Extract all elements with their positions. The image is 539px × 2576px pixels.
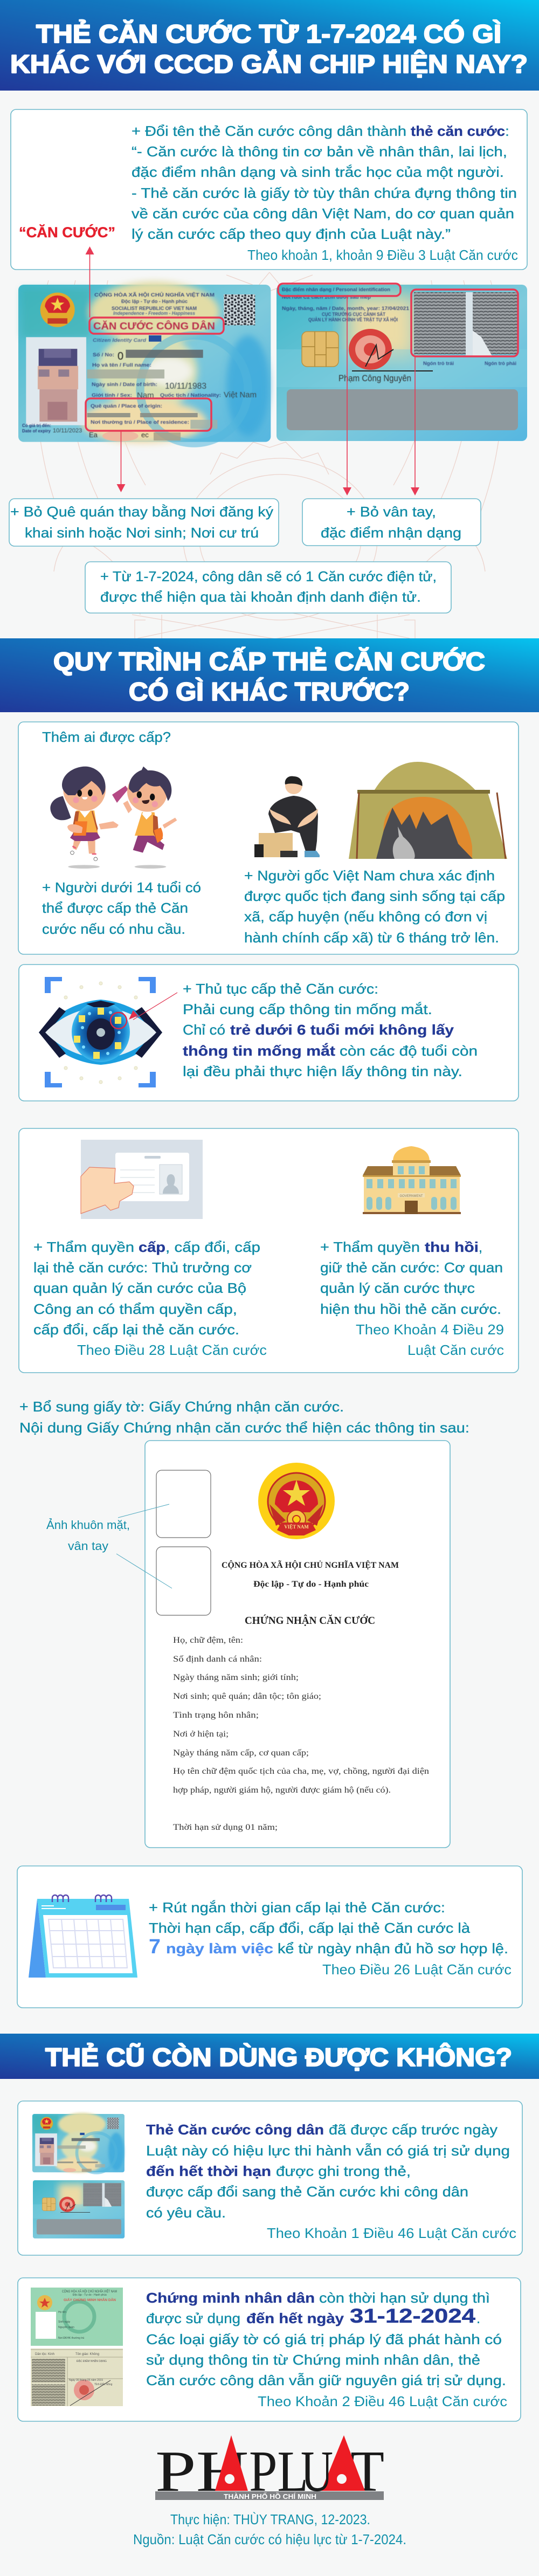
credits: Thực hiện: THÙY TRANG, 12-2023. xyxy=(170,2511,370,2527)
header: process section: QUY TRÌNH CẤP THẺ CĂN CƯỚC xyxy=(53,647,485,676)
document fields: Tình trạng hôn nhân; xyxy=(173,1711,259,1720)
text block: definition xyxy=(132,123,518,263)
text block: old ID rule: Luật này có hiệu lực thi hành vẫn có giá trị sử dụng xyxy=(146,2143,510,2159)
text block: seven working days: kể từ ngày nhận đủ hồ sơ hợp lệ. xyxy=(278,1940,508,1957)
image: front of citizen ID card: Có giá trị đến: xyxy=(22,423,51,428)
credits xyxy=(133,2511,406,2547)
text block: seven working days: + Rút ngắn thời gian cấp lại thẻ Căn cước: xyxy=(149,1899,445,1916)
text block: definition: “- Căn cước là thông tin cơ bản về nhân thân, lai lịch, xyxy=(132,143,507,160)
text block: old ID rule: đã được cấp trước ngày xyxy=(329,2122,497,2138)
text block: old ID rule: có yêu cầu. xyxy=(146,2205,226,2221)
text block: issuing authority xyxy=(33,1239,267,1358)
text block: children under 14: cước nếu có nhu cầu. xyxy=(42,921,185,937)
image: front of citizen ID card: Số / No: xyxy=(93,352,114,357)
panel: shorter issuing time xyxy=(17,1866,522,2008)
text block: people's ID rule: Căn cước công dân vẫn giữ nguyên giá trị sử dụng. xyxy=(146,2372,506,2388)
image: front of people's ID card: CỘNG HÒA XÃ HỘI CHỦ NGHĨA VIỆT NAM xyxy=(62,2289,117,2293)
header: process section xyxy=(0,638,539,712)
image: back of citizen ID card: QUẢN LÝ HÀNH CHÍNH VỀ TRẬT TỰ XÃ HỘI xyxy=(308,316,398,322)
text block: iris procedure: + Thủ tục cấp thẻ Căn cước: xyxy=(183,981,378,997)
callout: remove fingerprints xyxy=(302,499,481,546)
arrow: to iris xyxy=(129,993,179,1020)
text block: people's ID rule: Chứng minh nhân dân xyxy=(146,2290,315,2306)
text block: issuing authority: cấp xyxy=(139,1239,165,1255)
text block: issuing authority: , cấp đổi, cấp xyxy=(165,1239,260,1255)
text block: seven working days xyxy=(149,1899,512,1978)
text block: old ID rule: được ghi trong thẻ, xyxy=(276,2163,411,2179)
text block: revoking authority: , xyxy=(479,1239,482,1255)
document fields xyxy=(173,1636,429,1832)
callout: remove fingerprints: đặc điểm nhận dạng xyxy=(321,525,461,541)
image: front of people's ID card: GIẤY CHỨNG MINH NHÂN DÂN xyxy=(64,2298,116,2302)
text block: people's ID rule: Theo Khoản 2 Điều 46 Luật Căn cước xyxy=(258,2393,507,2409)
callout: remove fingerprints: + Bỏ vân tay, xyxy=(347,504,436,520)
text block: certificate intro: + Bổ sung giấy tờ: Giấy Chứng nhận căn cước. xyxy=(19,1399,344,1415)
text block: Vietnamese origin people: xã, cấp huyện (nếu không có đơn vị xyxy=(244,908,487,925)
logo: Pháp Luật xyxy=(155,2435,384,2504)
image: back of people's ID card: Dân tộc: Kinh xyxy=(35,2353,54,2356)
panel: old citizen ID card validity xyxy=(18,2101,522,2255)
text block: revoking authority: quản lý căn cước thực xyxy=(320,1280,475,1296)
image: front of citizen ID card: Citizen Identity Card xyxy=(93,338,147,343)
document fields: Ngày tháng năm sinh; giới tính; xyxy=(173,1673,299,1682)
header: main title: KHÁC VỚI CCCD GẮN CHIP HIỆN NAY? xyxy=(10,50,528,78)
image: front of people's ID card: Sinh ngày xyxy=(58,2320,71,2324)
logo: Pháp Luật: U xyxy=(301,2440,333,2504)
image: front of citizen ID card: Nam xyxy=(137,391,154,400)
text block: children under 14: + Người dưới 14 tuổi có xyxy=(42,879,201,896)
image: front of citizen ID card: Date of expiry xyxy=(22,429,51,433)
text block: Vietnamese origin people: + Người gốc Việt Nam chưa xác định xyxy=(244,867,495,884)
image: back of citizen ID card: Ngón trỏ trái xyxy=(423,361,454,366)
image: citizen ID thumbnails xyxy=(32,2113,125,2238)
document fields: Họ tên chữ đệm quốc tịch của cha, mẹ, vợ, chồng, người đại diện xyxy=(173,1767,429,1776)
document heading: CỘNG HÒA XÃ HỘI CHỦ NGHĨA VIỆT NAM xyxy=(222,1560,399,1570)
header: process section: CÓ GÌ KHÁC TRƯỚC? xyxy=(129,677,410,706)
image: front of citizen ID card: Độc lập - Tự do - Hạnh phúc xyxy=(121,299,188,304)
image: back of people's ID card: Ngày 06 tháng 05 năm 2015 xyxy=(69,2379,103,2382)
panel: renaming to căn cước xyxy=(11,109,527,270)
image: front of citizen ID card: 0 xyxy=(118,350,123,362)
label: face photo and fingerprint xyxy=(46,1504,172,1588)
logo: Pháp Luật: T xyxy=(350,2440,384,2504)
text block: Vietnamese origin people: hành chính cấp xã) từ 6 tháng trở lên. xyxy=(244,929,499,946)
text block: definition: lý căn cước cấp theo quy định của Luật này.” xyxy=(132,226,451,242)
text block: revoking authority: Theo Khoản 4 Điều 29 xyxy=(356,1321,504,1338)
icon: hand holding ID card xyxy=(81,1140,203,1219)
text block: old ID rule xyxy=(146,2122,516,2241)
image: front of people's ID card xyxy=(31,2288,123,2346)
icon: calendar xyxy=(29,1895,137,1978)
text block: seven working days: Thời hạn cấp, cấp đổi, cấp lại thẻ Căn cước là xyxy=(149,1920,471,1936)
image: front of citizen ID card: Ea xyxy=(89,431,98,439)
text block: seven working days: ngày làm việc xyxy=(166,1940,273,1957)
text block: issuing authority: cấp đổi, cấp lại thẻ căn cước. xyxy=(33,1321,239,1338)
image: front of people's ID card: Nơi ĐKHK thường trú xyxy=(58,2337,84,2340)
icon: government building xyxy=(363,1146,461,1214)
header: main title: THẺ CĂN CƯỚC TỪ 1-7-2024 CÓ GÌ xyxy=(36,19,501,48)
panel: people's ID card validity xyxy=(18,2278,521,2421)
text block: iris procedure: thông tin mống mắt xyxy=(183,1043,335,1059)
text block: old ID rule: được cấp đổi sang thẻ Căn cước khi công dân xyxy=(146,2184,468,2200)
callout: electronic ID xyxy=(85,562,451,613)
document fields: Nơi ở hiện tại; xyxy=(173,1730,229,1739)
text block: certificate intro: Nội dung Giấy Chứng nhận căn cước thể hiện các thông tin sau: xyxy=(19,1420,469,1436)
image: front of citizen ID card: ec xyxy=(141,431,149,439)
text block: seven working days: 7 xyxy=(149,1936,161,1958)
image: front of citizen ID card: Independence - Freedom - Happiness xyxy=(113,311,195,316)
text block: issuing authority: lại thẻ căn cước: Thủ trưởng cơ xyxy=(33,1259,252,1276)
text block: children under 14: thể được cấp thẻ Căn xyxy=(42,900,188,916)
image: front of citizen ID card: Quê quán / Place of origin: xyxy=(91,403,162,409)
image: front of citizen ID card: Họ và tên / Full name: xyxy=(92,362,151,368)
logo: Pháp Luật: PH xyxy=(155,2440,249,2504)
text block: iris procedure: Phải cung cấp thông tin mống mắt. xyxy=(183,1001,432,1017)
text block: definition: đặc điểm nhân dạng và sinh trắc học của một người. xyxy=(132,164,504,180)
text block: iris procedure xyxy=(183,981,478,1079)
text block: people's ID rule: Các loại giấy tờ có giá trị pháp lý đã phát hành có xyxy=(146,2331,502,2347)
text block: issuing authority: Theo Điều 28 Luật Căn cước xyxy=(77,1342,267,1358)
image: front of citizen ID card: CĂN CƯỚC CÔNG DÂN xyxy=(93,320,215,332)
callout: remove place of origin: khai sinh hoặc Nơi sinh; Nơi cư trú xyxy=(25,525,259,541)
text block: revoking authority xyxy=(320,1239,504,1358)
text block: people's ID rule xyxy=(146,2290,507,2409)
text block: definition: về căn cước của công dân Việt Nam, do cơ quan quản xyxy=(132,205,514,222)
red marker on the iris xyxy=(110,1013,127,1029)
image: front of people's ID card: Độc lập - Tự do - Hạnh phúc xyxy=(73,2293,107,2297)
text block: certificate intro xyxy=(19,1399,469,1436)
callout: remove place of origin: + Bỏ Quê quán thay bằng Nơi đăng ký xyxy=(10,504,273,520)
text block: definition: - Thẻ căn cước là giấy tờ tùy thân chứa đựng thông tin xyxy=(132,185,517,201)
header: main title xyxy=(0,0,539,91)
document fields: Họ, chữ đệm, tên: xyxy=(173,1636,243,1645)
text block: Vietnamese origin people xyxy=(244,867,505,946)
text block: old ID rule: Theo Khoản 1 Điều 46 Luật Căn cước xyxy=(267,2225,516,2241)
document fields: Số định danh cá nhân: xyxy=(173,1655,262,1664)
text block: people's ID rule: sử dụng thông tin từ Chứng minh nhân dân, thẻ xyxy=(146,2352,480,2368)
image: front of people's ID card: Nguyên quán xyxy=(58,2326,74,2329)
text block: revoking authority: thu hồi xyxy=(425,1239,479,1255)
image: back of citizen ID card: Đặc điểm nhân dạng / Personal identification xyxy=(282,287,390,292)
text block: definition: thẻ căn cước xyxy=(411,123,505,139)
image: back of people's ID card: Tôn giáo: Không xyxy=(75,2353,99,2356)
icon: homeless man with tent xyxy=(254,762,507,859)
icon: national emblem: VIỆT NAM xyxy=(284,1524,309,1530)
document heading: CHỨNG NHẬN CĂN CƯỚC xyxy=(245,1614,375,1627)
text block: issuing authority: quan quản lý căn cước của Bộ xyxy=(33,1280,246,1296)
text block: definition: : xyxy=(505,123,509,139)
text block: people's ID rule: 31-12-2024 xyxy=(350,2305,476,2327)
text block: Vietnamese origin people: được quốc tịch đang sinh sống tại cấp xyxy=(244,888,505,904)
text block: seven working days: Theo Điều 26 Luật Căn cước xyxy=(322,1961,512,1978)
header: old cards section xyxy=(0,2034,539,2079)
image: back of people's ID card: ĐẶC ĐIỂM NHẬN DẠNG xyxy=(77,2359,107,2363)
label: face photo and fingerprint: Ảnh khuôn mặt, xyxy=(46,1518,130,1532)
image: front of citizen ID card: 10/11/2023 xyxy=(53,428,82,434)
text block: iris procedure: trẻ dưới 6 tuổi mới không lấy xyxy=(230,1022,454,1038)
image: front of citizen ID card: 10/11/1983 xyxy=(165,382,206,391)
callout: electronic ID: được thể hiện qua tài khoản định danh điện tử. xyxy=(100,589,421,605)
document fields: Thời hạn sử dụng 01 năm; xyxy=(173,1823,278,1832)
image: front of citizen ID card: Việt Nam xyxy=(224,390,257,400)
text block: iris procedure: còn các độ tuổi còn xyxy=(340,1043,478,1059)
callout: electronic ID: + Từ 1-7-2024, công dân sẽ có 1 Căn cước điện tử, xyxy=(100,568,437,584)
image: front of citizen ID card: Giới tính / Sex: xyxy=(92,392,132,398)
icon: national emblem xyxy=(258,1463,335,1539)
icon: government building: GOVERNMENT xyxy=(399,1195,423,1198)
panel: who else is eligible xyxy=(18,722,519,954)
image: front of citizen ID card: Ngày sinh / Date of birth: xyxy=(92,382,157,387)
document heading: Độc lập - Tự do - Hạnh phúc xyxy=(253,1580,369,1589)
icon: two school children xyxy=(50,767,177,869)
image: back of citizen ID card: Ngón trỏ phải xyxy=(485,361,516,366)
text block: children under 14 xyxy=(42,879,201,937)
text block: revoking authority: + Thẩm quyền xyxy=(320,1239,420,1255)
credits: Nguồn: Luật Căn cước có hiệu lực từ 1-7-2024. xyxy=(133,2531,406,2547)
photo and fingerprint boxes xyxy=(156,1470,211,1615)
image: back of citizen ID card xyxy=(277,285,527,441)
image: back of citizen ID card: Nốt ruồi C2 cách 1cm dưới sau mép xyxy=(282,294,371,300)
text block: people's ID rule: còn thời hạn sử dụng thì xyxy=(319,2290,490,2306)
text block: issuing authority: Công an có thẩm quyền cấp, xyxy=(33,1301,237,1317)
image: back of citizen ID card: Phạm Công Nguyên xyxy=(338,373,411,383)
heading: who else: Thêm ai được cấp? xyxy=(42,729,171,745)
document heading xyxy=(222,1560,399,1627)
text block: revoking authority: giữ thẻ căn cước: Cơ quan xyxy=(320,1259,503,1276)
document fields: hợp pháp, người giám hộ, người được giám hộ (nếu có). xyxy=(173,1786,391,1795)
label: face photo and fingerprint: vân tay xyxy=(68,1539,108,1553)
image: back of people's ID card: Tỉnh Đắk Nông xyxy=(94,2382,113,2386)
text block: old ID rule: đến hết thời hạn xyxy=(146,2163,271,2179)
panel: iris data procedure xyxy=(19,965,519,1101)
watermark: national emblem outline xyxy=(36,272,503,639)
image: front of people's ID card: Họ tên xyxy=(58,2311,66,2314)
logo: Pháp Luật: PL xyxy=(249,2440,308,2504)
image: back of citizen ID card: CỤC TRƯỞNG CỤC CẢNH SÁT xyxy=(322,311,385,317)
logo: Pháp Luật: THÀNH PHỐ HỒ CHÍ MINH xyxy=(224,2492,316,2501)
text block: revoking authority: Luật Căn cước xyxy=(407,1342,504,1358)
text block: people's ID rule: đến hết ngày xyxy=(246,2310,344,2326)
panel: certificate document xyxy=(145,1441,450,1848)
text block: people's ID rule: . xyxy=(476,2310,480,2326)
icon: eye scan xyxy=(39,977,162,1087)
panel: issuing and revoking authority xyxy=(19,1128,519,1373)
image: front of citizen ID card: Quốc tịch / Nationality: xyxy=(160,392,221,398)
image: back of people's ID card xyxy=(31,2348,123,2406)
image: front of citizen ID card: SOCIALIST REPUBLIC OF VIET NAM xyxy=(112,306,197,311)
image: front of citizen ID card: CỘNG HÒA XÃ HỘI CHỦ NGHĨA VIỆT NAM xyxy=(94,292,215,298)
text block: issuing authority: + Thẩm quyền xyxy=(33,1239,134,1255)
label: căn cước in red: “CĂN CƯỚC” xyxy=(19,224,115,240)
text block: people's ID rule: được sử dụng xyxy=(146,2310,240,2326)
text block: revoking authority: hiện thu hồi thẻ căn cước. xyxy=(320,1301,501,1317)
text block: old ID rule: Thẻ Căn cước công dân xyxy=(146,2122,324,2138)
text block: iris procedure: Chỉ có xyxy=(183,1022,225,1038)
highlight boxes and arrows xyxy=(85,246,518,495)
image: back of citizen ID card: Ngày, tháng, năm / Date, month, year: 17/04/2021 xyxy=(282,306,409,311)
image: front of citizen ID card xyxy=(18,281,271,443)
document fields: Nơi sinh; quê quán; dân tộc; tôn giáo; xyxy=(173,1692,321,1701)
text block: definition: + Đổi tên thẻ Căn cước công dân thành xyxy=(132,123,406,139)
header: old cards section: THẺ CŨ CÒN DÙNG ĐƯỢC KHÔNG? xyxy=(45,2043,512,2071)
document fields: Ngày tháng năm cấp, cơ quan cấp; xyxy=(173,1748,309,1758)
text block: iris procedure: lại đều phải thực hiện lấy thông tin này. xyxy=(183,1063,462,1079)
text block: definition: Theo khoản 1, khoản 9 Điều 3 Luật Căn cước xyxy=(247,247,518,263)
callout: remove place of origin xyxy=(9,499,279,546)
image: front of citizen ID card: Nơi thường trú / Place of residence: xyxy=(91,419,189,425)
